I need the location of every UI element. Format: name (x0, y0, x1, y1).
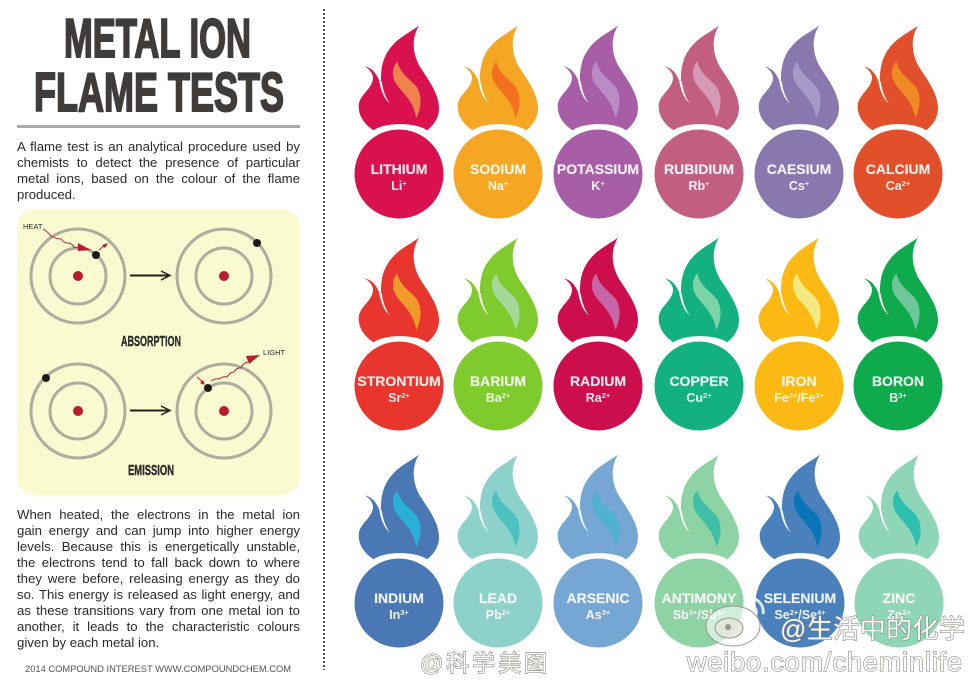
tile: rubidium (654, 26, 744, 218)
text block: explanation: levels. Because this is energetically unstable, (17, 539, 300, 554)
tile: calcium: Ca (886, 179, 902, 193)
watermark: science image handle: @科学美图 (420, 650, 547, 676)
tile: rubidium: + (705, 179, 710, 188)
tile: sodium: + (504, 179, 509, 188)
tile: caesium (754, 26, 844, 218)
tile: arsenic (554, 455, 642, 648)
text block: explanation: given by each metal ion. (17, 635, 159, 650)
panel: absorption and emission diagram (17, 209, 300, 495)
tile: lead: Pb (486, 608, 502, 622)
tile: potassium: POTASSIUM (557, 161, 639, 177)
tile: strontium: 2+ (401, 391, 410, 400)
tile: sodium (454, 26, 542, 218)
atom: emission start (31, 364, 125, 458)
tile: caesium: Cs (789, 179, 805, 193)
tile: radium: 2+ (602, 391, 611, 400)
tile: indium: 3+ (400, 608, 409, 617)
tile: boron (854, 238, 942, 430)
tile: zinc (854, 455, 944, 648)
tile: potassium: K (591, 179, 600, 193)
tile: antimony: ANTIMONY (662, 590, 737, 606)
tile: selenium: Se (774, 608, 790, 622)
tile: iron: Fe (774, 391, 789, 405)
tile: barium: Ba (486, 391, 502, 405)
tile: arsenic: ARSENIC (566, 590, 630, 606)
tile: radium: Ra (586, 391, 602, 405)
tile: lithium: Li (391, 179, 402, 193)
footer credit: 2014 COMPOUND INTEREST WWW.COMPOUNDCHEM.COM (25, 663, 291, 674)
heading: emission: EMISSION (128, 463, 174, 479)
tile: selenium: 2+ (790, 608, 799, 617)
tile: copper: COPPER (669, 373, 729, 389)
arrow: emission (130, 406, 170, 415)
tile: boron: BORON (872, 373, 924, 389)
tile: antimony: /Sb (697, 608, 717, 622)
tile: antimony: 3+ (689, 608, 698, 617)
tile: caesium: CAESIUM (767, 161, 831, 177)
tile: iron: IRON (782, 373, 816, 389)
title (34, 7, 284, 123)
text block: intro: A flame test is an analytical procedure used by (17, 139, 300, 154)
icon: heat arrow (43, 229, 108, 251)
icon: weibo watermark logo (706, 598, 763, 646)
tile: indium (354, 455, 444, 648)
tile: indium: In (389, 608, 400, 622)
tile: zinc: ZINC (883, 590, 915, 606)
tile: indium: INDIUM (374, 590, 424, 606)
text block: intro: metal ions, based on the colour of the flame (17, 171, 300, 186)
tile: selenium: 4+ (817, 608, 826, 617)
tile: iron: 2+ (789, 391, 798, 400)
tile: potassium: + (600, 179, 605, 188)
text block: explanation: so. This energy is released as light energy, and (17, 587, 300, 602)
tile: zinc: Zn (887, 608, 902, 622)
watermark: weibo url: weibo.com/cheminlife (686, 647, 962, 677)
text block: explanation: they were before, releasing energy as they do (17, 571, 300, 586)
tile: selenium (756, 455, 844, 648)
tile: iron: 3+ (815, 391, 824, 400)
title: FLAME TESTS (34, 61, 284, 123)
tile: lithium (354, 26, 444, 218)
tile: iron: /Fe (797, 391, 815, 405)
tile: arsenic: As (586, 608, 602, 622)
label: light: LIGHT (263, 348, 286, 357)
tile: arsenic: 3+ (602, 608, 611, 617)
arrow: absorption (130, 271, 170, 280)
text block: explanation: another, it leads to the characteristic colours (17, 619, 300, 634)
tile: iron (754, 238, 844, 430)
tile: barium: BARIUM (470, 373, 526, 389)
tile: radium: RADIUM (570, 373, 626, 389)
atom: absorption end (177, 229, 271, 323)
watermark: chinese handle: @生活中的化学 (780, 614, 965, 644)
tile: lithium: + (402, 179, 407, 188)
tile: barium (454, 238, 542, 430)
label: heat: HEAT (23, 222, 43, 231)
tile: boron: B (889, 391, 898, 405)
text block: explanation: gain energy and can jump into higher energy (17, 523, 300, 538)
tile: copper (654, 238, 744, 430)
tile: lead (454, 455, 542, 648)
tile: antimony (654, 455, 744, 648)
tile: zinc: 2+ (902, 608, 912, 617)
tile: rubidium: RUBIDIUM (664, 161, 734, 177)
tile: strontium: Sr (388, 391, 401, 405)
tile: sodium: Na (488, 179, 504, 193)
tile: potassium (554, 26, 642, 218)
tile: antimony: Sb (673, 608, 689, 622)
tile: calcium: CALCIUM (866, 161, 930, 177)
tile: radium (554, 238, 642, 430)
tile: selenium: /Se (798, 608, 817, 622)
atom: absorption start (31, 229, 125, 323)
tile: lead: LEAD (479, 590, 517, 606)
tile: selenium: SELENIUM (764, 590, 836, 606)
tile: copper: Cu (686, 391, 703, 405)
tile: calcium: 2+ (902, 179, 911, 188)
text block: explanation (17, 507, 300, 650)
text block: explanation: the electrons tend to fall back down to where (17, 555, 300, 570)
tile: barium: 2+ (502, 391, 511, 400)
tile: strontium: STRONTIUM (357, 373, 441, 389)
tile: lithium: LITHIUM (371, 161, 427, 177)
icon: light arrow (197, 355, 260, 385)
tile: calcium (854, 26, 942, 218)
tile: copper: 2+ (703, 391, 712, 400)
tile: strontium (354, 238, 444, 430)
tile: antimony: 5+ (717, 608, 726, 617)
text block: explanation: When heated, the electrons in the metal ion (17, 507, 300, 522)
text block: intro: chemists to detect the presence of particular (17, 155, 300, 170)
tile: boron: 3+ (898, 391, 907, 400)
tile: lead: 2+ (502, 608, 511, 617)
tile: caesium: + (805, 179, 810, 188)
tile: sodium: SODIUM (470, 161, 526, 177)
heading: absorption: ABSORPTION (121, 334, 181, 350)
text block: intro: produced. (17, 187, 76, 202)
atom: emission end (177, 364, 271, 458)
text block: explanation: as these transitions vary from one metal ion to (17, 603, 300, 618)
text block: intro (17, 139, 300, 202)
tile: rubidium: Rb (688, 179, 705, 193)
title: METAL ION (64, 7, 251, 69)
